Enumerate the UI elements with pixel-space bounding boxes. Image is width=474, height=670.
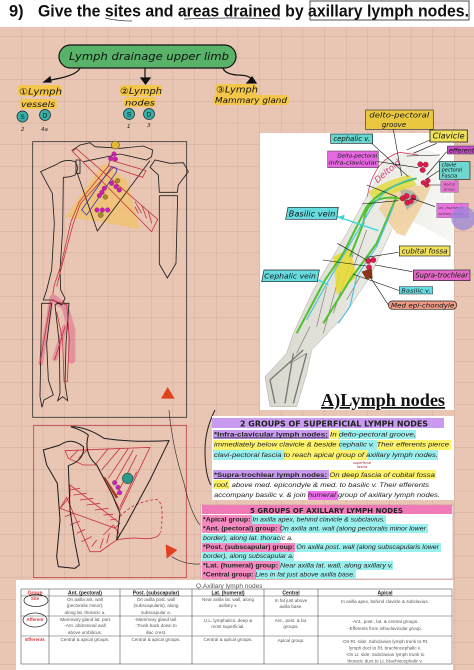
text: supra-trochlear: accompany basilic v. & join humeral group of axillary lymph nodes. [214, 492, 440, 499]
heading: 5 groups: 5 GROUPS OF AXILLARY LYMPH NODES [250, 507, 403, 515]
table body: axillary v. [219, 603, 237, 608]
text: infra-clavicular [213, 430, 451, 460]
table body: most superficial. [211, 624, 245, 629]
panel: anatomical arm image [260, 110, 474, 410]
handwritten note: superficial fascia: superficial [353, 461, 371, 465]
green lymph vessels [297, 178, 417, 333]
panel: axillary lymph nodes [201, 505, 453, 579]
branch: lymph mammary gland [213, 84, 289, 105]
table body: Central & apical groups. [131, 637, 181, 642]
branch: lymph nodes: 1 [127, 124, 130, 130]
leader lines [323, 129, 447, 305]
branch: lymph vessels: vessels [21, 100, 55, 109]
table body: lymph duct to Rt. brachiocephalic v. [349, 646, 421, 650]
red muscles [40, 148, 158, 382]
muscles hatched [60, 447, 162, 552]
table body: iliac crest. [146, 630, 166, 635]
table body: Near axilla lat. wall, along [202, 597, 254, 602]
table body: In fat just above [275, 598, 308, 603]
table body: (pectoralis minor), [67, 603, 103, 608]
table grid [21, 589, 452, 664]
table body: -On Lt. side: Subclavian lymph trunk to [346, 652, 425, 657]
blue cyan veins [307, 178, 413, 323]
red triangle marker [161, 387, 175, 399]
table header row: Group [28, 590, 42, 596]
table body: On axilla ant. wall [67, 597, 103, 602]
label: basilic v. [399, 287, 433, 294]
text: supra-trochlear: roof, above med. epicondyle & med. to basilic v. Their efferents [214, 482, 430, 489]
table header row: Apical [377, 590, 393, 596]
branch: lymph nodes [120, 85, 162, 130]
table body: In axilla apex, behind clavicle & subclavius. [341, 599, 429, 604]
label: basilic vein: Basilic vein [289, 209, 335, 218]
heading: 2 groups: 2 GROUPS OF SUPERFICIAL LYMPH NODES [240, 420, 428, 428]
branch: lymph vessels: D [43, 112, 48, 120]
label: apical group [441, 181, 458, 192]
branch: lymph vessels: 2 [21, 127, 25, 133]
branch: lymph nodes: ②Lymph [120, 87, 162, 97]
handwritten note: superficial fascia [353, 461, 371, 469]
text: infra-clavicular: *Infra-clavicular lymph nodes: In delto-pectoral groove, [214, 432, 416, 438]
label: med epi-chondyle: Med epi-chondyle [391, 302, 454, 309]
text: infra-clavicular: immediately below clavicle & beside cephalic v. Their efferents pierce [214, 442, 449, 448]
table body: -Efferents from infraclavicular group. [348, 626, 422, 631]
table body: Apical group. [278, 638, 304, 643]
group descriptions: *Ant. (pectoral) group: On axilla ant. wall (along pectoralis minor lower [203, 526, 427, 532]
blue vessel [82, 167, 117, 215]
label: supra-trochlear: Supra-trochlear [415, 272, 469, 280]
table body: (subscapularis), along [134, 603, 179, 608]
label: clavi-pectoral fascia: Fascia [442, 173, 457, 179]
label: clavi-pectoral fascia: clavie [442, 163, 456, 169]
text: supra-trochlear [213, 470, 440, 500]
label: cubital fossa: cubital fossa [402, 248, 448, 256]
branch: lymph vessels: S [20, 114, 25, 121]
heading: A) Lymph nodes: A)Lymph nodes [321, 390, 445, 410]
group descriptions: *Apical group: In axilla apex, behind clavicle & subclavius. [203, 518, 385, 524]
label: lateral humeral group: axillary group [438, 212, 464, 216]
axillary area [378, 185, 432, 236]
group descriptions: border), along subscapular a. [203, 554, 294, 560]
table body: -On Rt. side: Subclavian lymph trunk to Rt. [342, 639, 428, 644]
table body: axilla base. [280, 604, 302, 609]
table body: Central & apical groups. [60, 637, 110, 642]
branch: lymph vessels [17, 85, 62, 133]
table body: On axilla post. wall [137, 597, 175, 602]
label: cubital fossa [399, 246, 450, 256]
group descriptions: *Central group: Lies in fat just above axilla base. [203, 572, 355, 578]
arrows from heading [44, 68, 256, 84]
group descriptions: border), along lat. thoracic a. [203, 536, 293, 542]
label: cephalic vein [262, 270, 319, 282]
branch: lymph nodes: D [147, 112, 152, 118]
label: delto-pectoral groove: delto-pectoral [369, 112, 429, 120]
yellow patch [333, 248, 357, 295]
label: clavicle: Clavicle [433, 130, 465, 140]
label: apical group: group [444, 187, 455, 191]
table body: Ant., post. & lat. [275, 618, 307, 623]
red triangle marker [166, 544, 177, 559]
branch: lymph vessels: ①Lymph [19, 88, 62, 98]
diagram: axilla walls [34, 410, 200, 578]
flowchart: lymph drainage upper limb [17, 45, 289, 133]
branch: lymph vessels: 4a [41, 127, 48, 133]
group descriptions: *Post. (subscapular) group: On axilla post. wall (along subscapularis lower [203, 545, 440, 551]
label: delto-pectoral infra-clavicular [328, 151, 378, 168]
table body: groups. [283, 624, 299, 629]
heading: 5 groups [202, 505, 452, 515]
title: 9) [9, 2, 24, 20]
label: delto-pectoral infra-clavicular: infra-clavicular [329, 161, 378, 167]
table body: above umbilicus. [68, 630, 102, 635]
heading pill: Lymph drainage upper limb [69, 51, 229, 63]
label: delto-pectoral groove: groove [382, 121, 406, 129]
diagram: upper limb skeleton and lymph vessels [33, 141, 188, 417]
bones outline [43, 427, 169, 568]
table header row [28, 590, 393, 596]
nodes [95, 152, 122, 212]
deltoid [367, 152, 418, 197]
heading pill [59, 45, 236, 68]
text: infra-clavicular: clavi-pectoral fascia to reach apical group of axillary lymph nodes. [214, 452, 438, 459]
branch: lymph mammary gland: ③Lymph [216, 86, 258, 96]
table body: along lat. thoracic a. [64, 610, 106, 615]
row labels: Efferents [25, 637, 45, 642]
pink highlight [41, 298, 72, 363]
branch: lymph nodes: S [127, 112, 132, 118]
row labels [23, 594, 48, 642]
title: Give the sites and areas drained by axillary lymph nodes. [38, 2, 469, 20]
label: efferent: efferent [449, 146, 474, 154]
branch: lymph nodes: 3 [147, 123, 151, 129]
branch: lymph nodes: nodes [125, 98, 155, 108]
table body: -Mammary gland lat. part. [59, 617, 111, 622]
table body: U.L. lymphatics, deep & [204, 618, 252, 623]
group descriptions [202, 515, 441, 579]
label: clavi-pectoral fascia: pectoral [441, 168, 463, 174]
table body: subscapular a. [141, 610, 171, 615]
table header row: Ant. (pectoral) [68, 590, 102, 596]
arm [265, 150, 454, 407]
table header row: Lat. (humeral) [211, 590, 245, 596]
label: basilic v.: Basilic v. [401, 288, 431, 294]
panel: anatomical arm image: Deltoid [373, 158, 403, 186]
table header row: Central [282, 590, 300, 596]
handwritten note: superficial fascia: fascia [357, 465, 367, 469]
bones [40, 143, 188, 407]
branch: lymph mammary gland: Mammary gland [215, 96, 287, 105]
label: lateral humeral group: lat, (humeral) [438, 206, 464, 210]
group descriptions: *Lat. (humeral) group: Near axilla lat. wall, along axillary v. [203, 564, 393, 570]
label: lateral humeral group [437, 203, 468, 218]
label: clavi-pectoral fascia [439, 162, 470, 179]
label: cephalic v.: cephalic v. [333, 135, 370, 143]
table body: -Trunk back down to [135, 623, 177, 628]
row labels: Afferent [26, 617, 44, 622]
panel: superficial lymph nodes [212, 416, 454, 500]
label: basilic vein [286, 207, 338, 219]
axillary region [65, 163, 140, 229]
table title: Q.Axillary lymph nodes [196, 583, 263, 590]
table body: -Ant. abdominal wall [64, 623, 106, 628]
label: cephalic vein: Cephalic vein [264, 272, 316, 281]
table body: -Ant., post., lat. & central groups. [352, 619, 418, 624]
red nodes [366, 162, 430, 270]
table header row: Post. (subscapular) [133, 590, 180, 596]
panel: comparison table [16, 580, 453, 670]
table body: thoracic duct to Lt. brachiocephalic v. [347, 658, 423, 664]
label: delto-pectoral infra-clavicular: Delto-pectoral [337, 154, 378, 160]
label: med epi-chondyle [388, 301, 457, 309]
text: supra-trochlear: *Supra-trochlear lymph nodes: On deep fascia of cubital fossa [214, 472, 435, 479]
heading: 2 groups [212, 418, 444, 428]
row labels: Site [31, 596, 40, 601]
label: delto-pectoral groove [366, 110, 433, 129]
label: apical group: Apical [443, 183, 455, 187]
table body: Central & apical groups. [203, 637, 253, 642]
table body [59, 597, 429, 664]
curved bracket arrow [205, 410, 215, 485]
table body: -Mammary gland tail. [135, 617, 177, 622]
